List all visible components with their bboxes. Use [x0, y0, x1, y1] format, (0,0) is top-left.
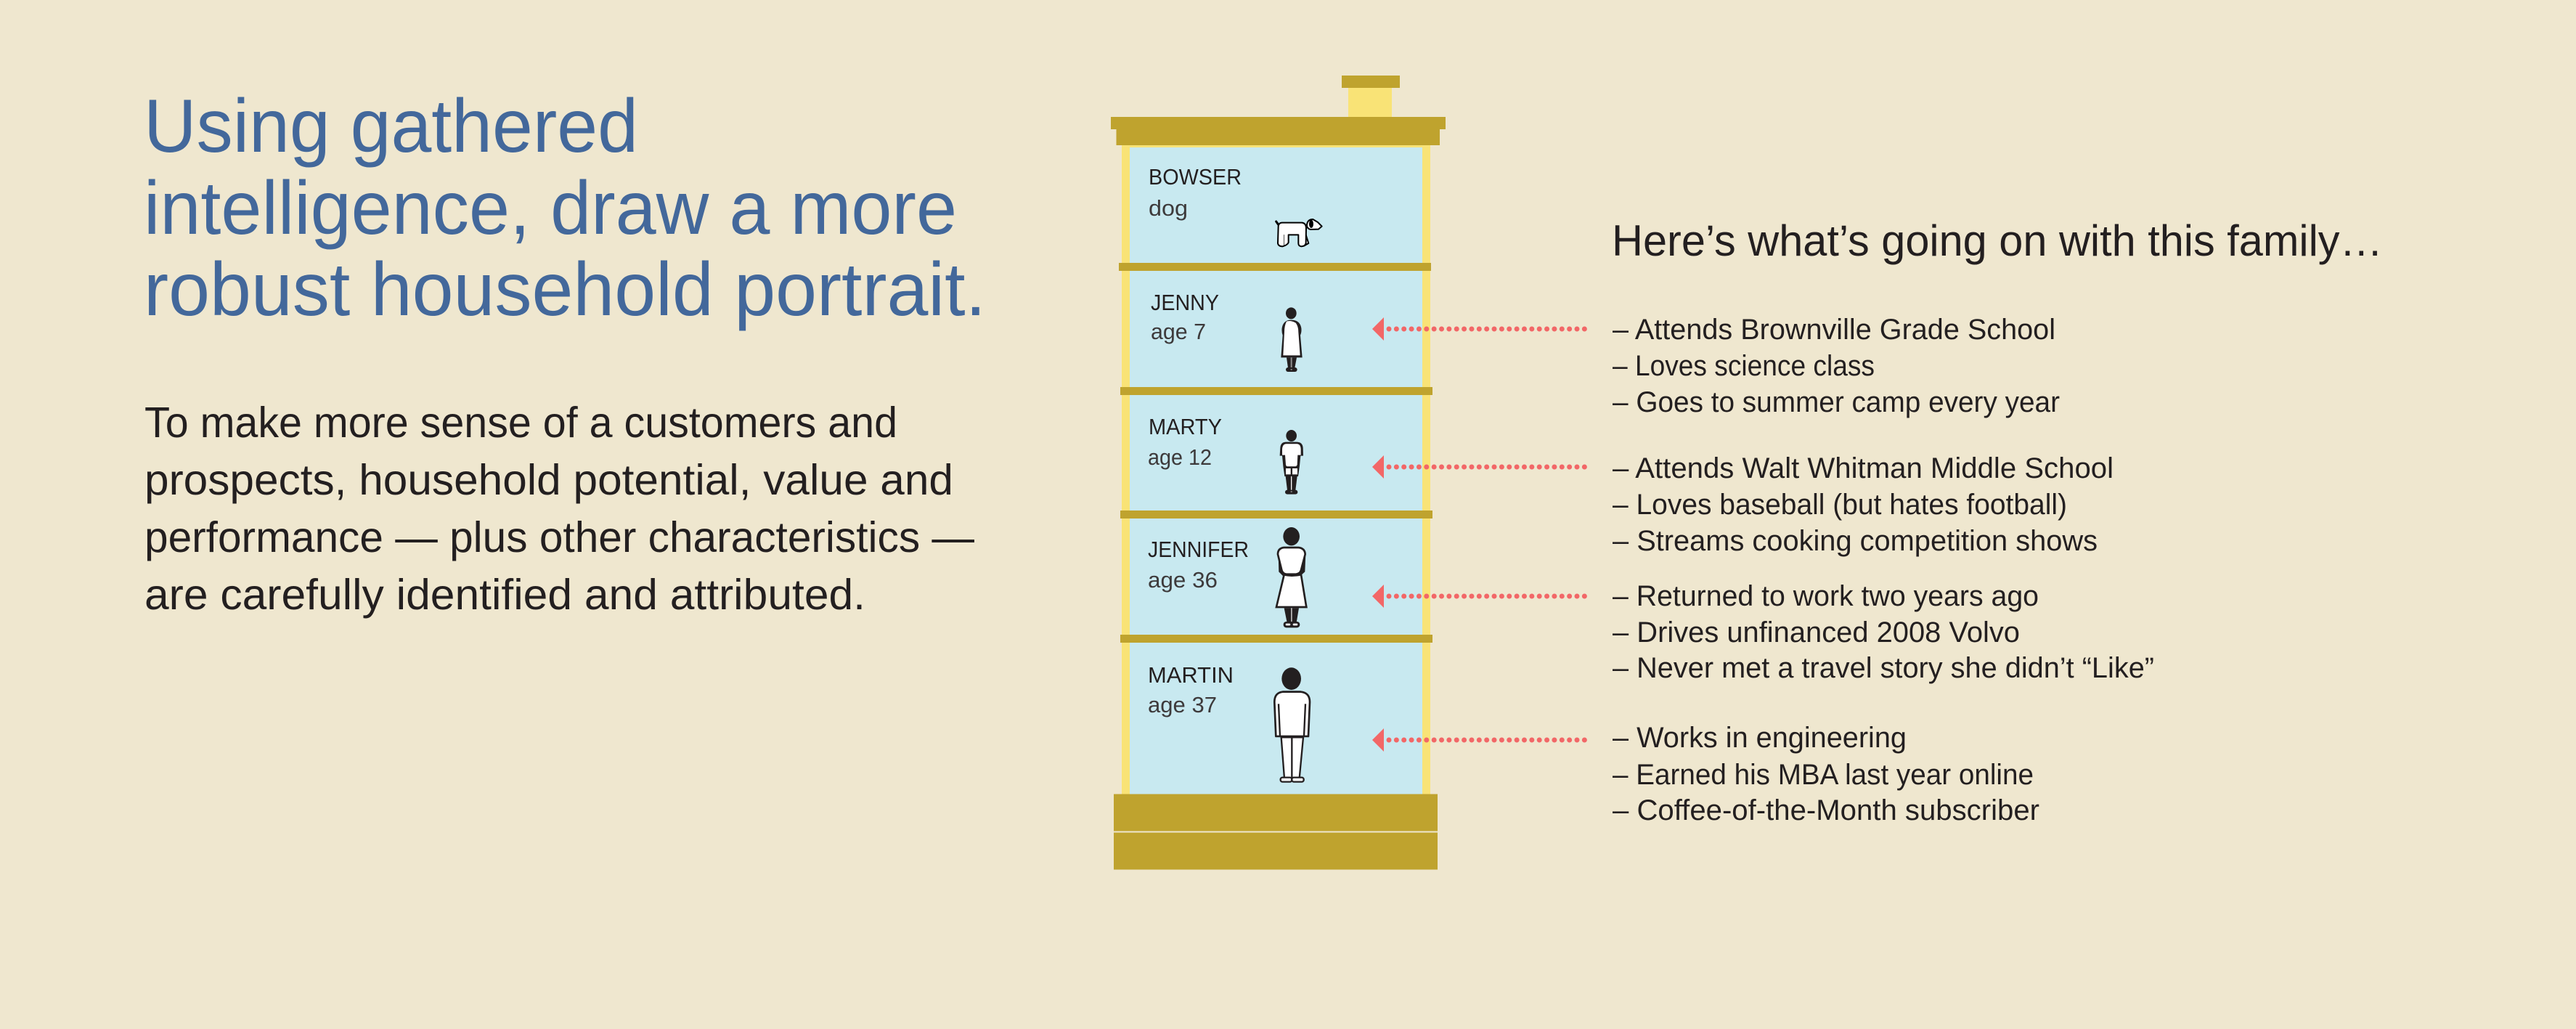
list: Jennifer facts: – Never met a travel story she didn’t “Like”	[1613, 652, 2154, 684]
chimney	[1342, 76, 1400, 117]
label: Marty: MARTY	[1149, 414, 1222, 439]
icon: man figure	[1274, 667, 1310, 782]
body text block: are carefully identified and attributed.	[144, 571, 865, 619]
label: Jennifer: JENNIFER	[1148, 537, 1249, 562]
body text block: To make more sense of a customers and	[144, 399, 897, 447]
label: Jenny: age 7	[1151, 319, 1206, 344]
label: Bowser	[1149, 164, 1242, 221]
label: Jennifer	[1148, 537, 1249, 593]
list: Jenny facts: – Loves science class	[1613, 350, 1875, 382]
label: Jenny: JENNY	[1151, 290, 1219, 315]
body text block	[144, 399, 974, 619]
floor dividers	[1119, 263, 1432, 643]
house walls and rooms	[1122, 145, 1430, 798]
list: Marty facts	[1613, 452, 2114, 557]
roof	[1111, 117, 1446, 145]
list: Jennifer facts: – Returned to work two years ago	[1613, 580, 2039, 612]
label: Jennifer: age 36	[1148, 567, 1218, 593]
title: intelligence, draw a more	[144, 166, 957, 251]
room: Bowser	[1149, 164, 1322, 246]
arrow: Jennifer	[1372, 585, 1589, 608]
family heading: Here’s what’s going on with this family…	[1612, 216, 2383, 265]
list: Marty facts: – Attends Walt Whitman Middle School	[1613, 452, 2114, 484]
room: Jenny	[1151, 290, 1303, 372]
house illustration	[1111, 76, 1446, 870]
title: robust household portrait.	[144, 248, 986, 332]
label: Martin: MARTIN	[1148, 662, 1234, 688]
label: Marty	[1148, 414, 1222, 470]
list: Martin facts	[1613, 722, 2039, 826]
room: Jennifer	[1148, 527, 1306, 627]
arrow: Marty	[1372, 455, 1589, 479]
label: Martin: age 37	[1148, 692, 1217, 717]
list: Marty facts: – Streams cooking competition shows	[1613, 525, 2098, 557]
list: Jenny facts: – Goes to summer camp every year	[1613, 386, 2060, 418]
label: Jenny	[1151, 290, 1219, 344]
list: Jenny facts: – Attends Brownville Grade School	[1613, 314, 2055, 346]
list: Martin facts: – Coffee-of-the-Month subscriber	[1613, 794, 2039, 826]
title: Using gathered	[144, 84, 638, 168]
icon: girl figure	[1281, 307, 1303, 372]
body text block: performance — plus other characteristics —	[144, 513, 974, 561]
icon: dog	[1276, 219, 1322, 246]
list: Jennifer facts	[1613, 580, 2154, 684]
list: Jennifer facts: – Drives unfinanced 2008 Volvo	[1613, 617, 2020, 648]
list: Martin facts: – Works in engineering	[1613, 722, 1907, 754]
label: Bowser: dog	[1149, 195, 1188, 221]
list: Marty facts: – Loves baseball (but hates football)	[1613, 489, 2067, 521]
list: Martin facts: – Earned his MBA last year online	[1613, 759, 2034, 791]
label: Marty: age 12	[1148, 444, 1212, 470]
label: Bowser: BOWSER	[1149, 164, 1242, 190]
title	[144, 84, 986, 332]
icon: woman figure	[1276, 527, 1306, 627]
arrow: Martin	[1372, 728, 1589, 752]
room: Marty	[1148, 414, 1303, 495]
body text block: prospects, household potential, value and	[144, 456, 953, 504]
label: Martin	[1148, 662, 1234, 717]
foundation	[1114, 794, 1438, 870]
list: Jenny facts	[1613, 314, 2060, 418]
room: Martin	[1148, 662, 1310, 782]
arrow: Jenny	[1372, 317, 1589, 341]
icon: boy figure	[1280, 430, 1303, 495]
